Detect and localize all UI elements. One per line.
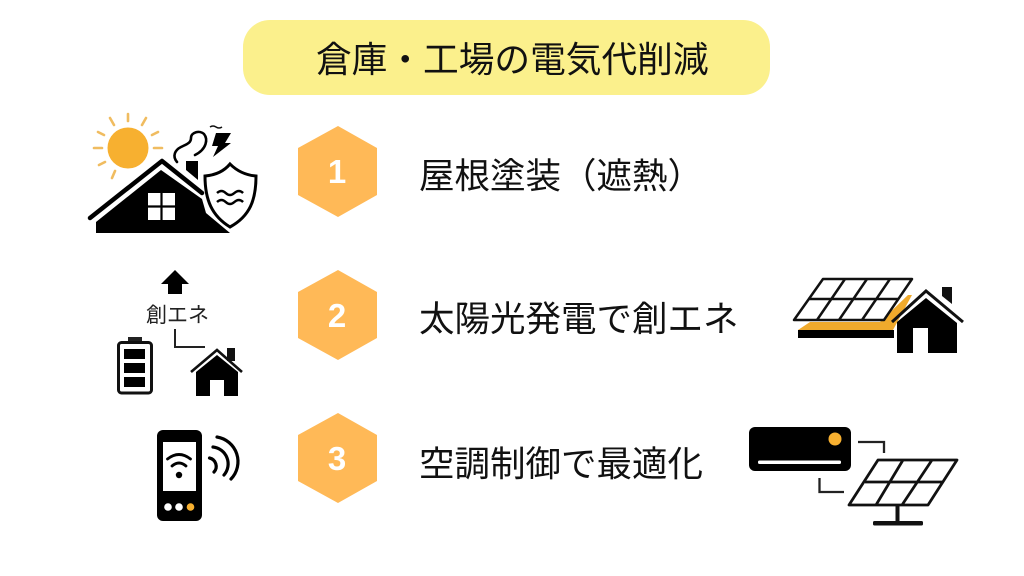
icon: smoke — [174, 132, 206, 162]
marker 2: 2 — [328, 297, 346, 334]
title: 倉庫・工場の電気代削減 — [316, 40, 709, 80]
connector — [175, 329, 205, 347]
icon label: 創エネ — [146, 304, 209, 327]
icon: sun — [94, 114, 162, 178]
icon: house — [892, 287, 963, 353]
icon: small house — [191, 348, 242, 396]
marker 1: 1 — [328, 153, 346, 190]
icon: up arrow — [161, 270, 189, 294]
icon: air conditioner — [749, 427, 851, 471]
icon: lightning bolt — [210, 126, 231, 157]
icon: solar roof house — [794, 279, 963, 353]
icon: solar panel — [794, 279, 912, 320]
icon: house with roof — [90, 161, 230, 233]
icon: smartphone with wifi — [157, 430, 238, 521]
icon: battery — [118, 337, 152, 393]
icon: sun, house and shield — [90, 114, 256, 233]
icon: energy creation diagram — [118, 270, 242, 396]
icon: air conditioner and solar panel — [749, 427, 957, 526]
icon: shield with waves — [205, 164, 256, 227]
marker 2 — [298, 270, 377, 360]
marker 3 — [298, 413, 377, 503]
label 2: 太陽光発電で創エネ — [419, 299, 739, 339]
icon: solar panel on stand — [849, 460, 957, 526]
connectors — [820, 442, 884, 492]
marker 3: 3 — [328, 440, 346, 477]
title — [243, 20, 770, 95]
marker 1 — [298, 126, 377, 217]
label 1: 屋根塗装（遮熱） — [419, 156, 703, 196]
roof band — [798, 295, 912, 330]
label 3: 空調制御で最適化 — [419, 444, 703, 484]
